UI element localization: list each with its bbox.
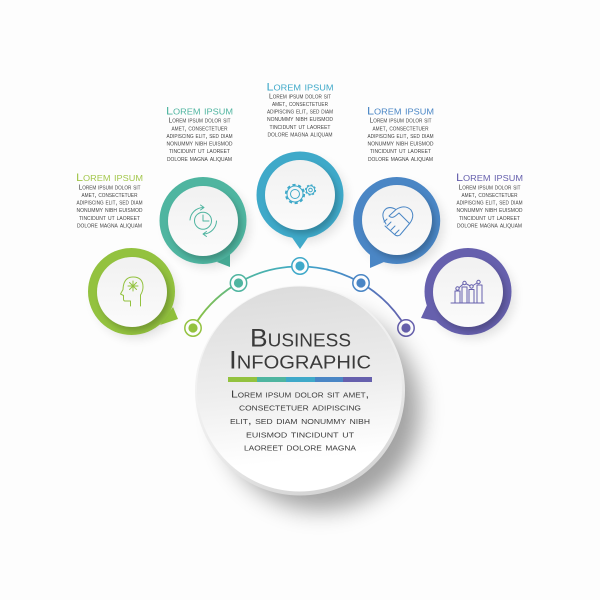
text block: indigo: [368, 116, 434, 163]
ring with pointer: green: [88, 248, 178, 339]
title: Business: [250, 324, 351, 352]
ring with pointer: purple: [421, 248, 515, 339]
panel: central disc: [195, 286, 420, 510]
panel: step 1 green: [76, 172, 178, 339]
connecting arc: [193, 267, 406, 328]
body text: euismod tincidunt ut: [246, 428, 355, 440]
heading: blue: Lorem ipsum: [266, 82, 334, 94]
text block: purple: Lorem ipsum dolor sit: [458, 182, 520, 191]
node: teal: [230, 275, 247, 291]
text block: blue: Lorem ipsum dolor sit: [269, 92, 331, 100]
text block: indigo: nonummy nibh euismod: [368, 138, 434, 148]
text block: green: nonummy nibh euismod: [76, 205, 143, 214]
icon: clock with arrows: [190, 205, 216, 236]
ring with pointer: indigo: [353, 177, 444, 268]
ring with pointer: teal: [160, 177, 250, 268]
text block: indigo: tincidunt ut laoreet: [370, 146, 431, 155]
text block: teal: adipiscing elit, sed diam: [166, 131, 232, 140]
icon: head: [120, 277, 143, 306]
text block: blue: dolore magna aliquam: [268, 130, 332, 138]
node: purple: [398, 320, 414, 336]
node: green: [185, 320, 201, 336]
disc shadow and face: [195, 286, 420, 510]
text block: purple: nonummy nibh euismod: [456, 205, 523, 214]
text block: blue: amet, consectetuer: [272, 99, 328, 108]
text block: teal: Lorem ipsum dolor sit: [168, 116, 230, 125]
text block: purple: [456, 182, 523, 230]
text block: green: amet, consectetuer: [82, 190, 138, 199]
heading: purple: Lorem ipsum: [456, 172, 523, 184]
icon: bar chart: [451, 280, 484, 303]
text block: teal: dolore magna aliquam: [167, 154, 232, 163]
body text: laoreet dolore magna: [244, 442, 356, 454]
body text: elit, sed diam nonummy nibh: [230, 415, 370, 427]
text block: blue: tincidunt ut laoreet: [270, 122, 330, 131]
body text: Lorem ipsum dolor sit amet,: [231, 388, 369, 400]
text block: purple: tincidunt ut laoreet: [459, 213, 520, 222]
heading: green: Lorem ipsum: [76, 172, 143, 184]
ring with pointer: blue: [256, 152, 347, 249]
node: blue: [292, 258, 308, 274]
icon: handshake heart: [383, 207, 413, 236]
body text: [230, 388, 370, 454]
text block: green: Lorem ipsum dolor sit: [78, 182, 140, 192]
heading: teal: Lorem ipsum: [166, 106, 233, 118]
title: Infographic: [229, 346, 371, 374]
text block: indigo: Lorem ipsum dolor sit: [370, 116, 432, 125]
text block: teal: amet, consectetuer: [172, 123, 228, 132]
text block: indigo: amet, consectetuer: [372, 123, 429, 132]
heading: indigo: Lorem ipsum: [367, 106, 434, 118]
text block: green: adipiscing elit, sed diam: [76, 198, 142, 207]
text block: teal: nonummy nibh euismod: [166, 138, 233, 148]
node: indigo: [353, 275, 369, 291]
text block: purple: dolore magna aliquam: [457, 221, 522, 230]
panel: step 3 blue: [256, 82, 347, 249]
text block: green: dolore magna aliquam: [77, 221, 142, 230]
title: [229, 324, 371, 374]
icon: gears: [286, 185, 316, 203]
body text: consectetuer adipiscing: [239, 402, 361, 414]
text block: teal: [166, 116, 233, 163]
text block: blue: adipiscing elit, sed diam: [267, 107, 333, 116]
text block: indigo: adipiscing elit, sed diam: [368, 131, 434, 140]
text block: green: [76, 182, 143, 230]
text block: teal: tincidunt ut laoreet: [169, 146, 230, 155]
colour bar: [228, 377, 372, 382]
text block: indigo: dolore magna aliquam: [368, 154, 433, 163]
text block: blue: [267, 92, 333, 138]
panel: step 5 purple: [421, 172, 523, 339]
text block: purple: adipiscing elit, sed diam: [456, 198, 522, 207]
text block: green: tincidunt ut laoreet: [79, 213, 140, 222]
text block: blue: nonummy nibh euismod: [267, 114, 333, 123]
panel: step 4 indigo: [353, 106, 444, 268]
text block: purple: amet, consectetuer: [462, 190, 518, 199]
panel: step 2 teal: [160, 106, 250, 268]
